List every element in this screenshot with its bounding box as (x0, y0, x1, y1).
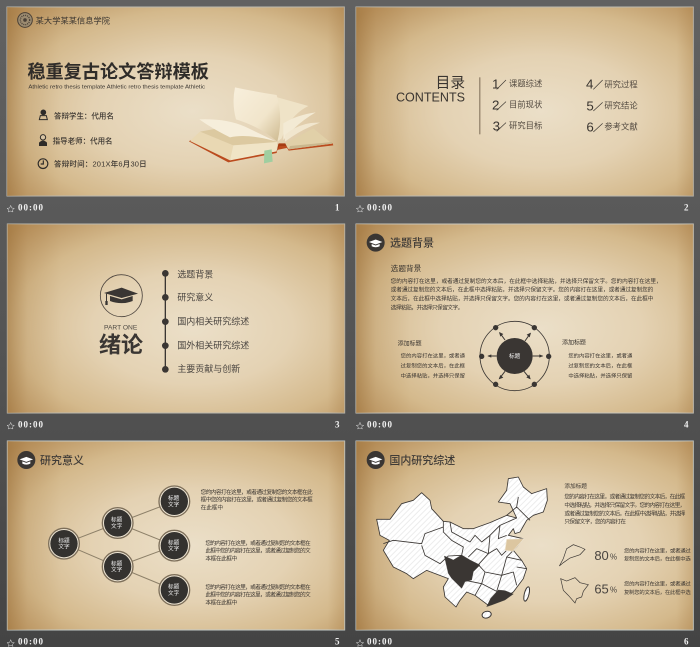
Shandong (505, 539, 524, 551)
icon: graduation cap in circle (100, 275, 142, 317)
stat 65% text (624, 579, 691, 596)
heading: 国内研究综述 (389, 453, 455, 467)
text block 2 (205, 539, 311, 562)
footer: time: 00:00 (18, 419, 44, 429)
student line: 答辩学生：代用名 (54, 111, 114, 121)
school name: 某大学某某信息学院 (36, 15, 110, 25)
stat 80% text: 您的内容打在这里，或者通过 (624, 546, 691, 554)
Guangdong (487, 590, 513, 607)
footer: time: 00:00 (367, 419, 393, 429)
tree nodes: 标题 (168, 538, 180, 546)
Taiwan (523, 586, 531, 602)
paragraph: 选择粘贴，并选择只保留文字。 (391, 304, 463, 312)
text block 2: 您的内容打在这里，或者通过复制您的文本框在 (205, 539, 311, 547)
radial diagram: 标题 (509, 352, 521, 360)
left text block: 您的内容打在这里，或者通 (401, 352, 466, 360)
footer: page number: 5 (335, 637, 340, 647)
heading: CONTENTS: CONTENTS (396, 90, 465, 105)
slide 5: significance (7, 441, 345, 647)
timeline labels (177, 269, 249, 374)
footer: page number: 2 (684, 202, 689, 212)
stat 80% text: 复制您的文本后，在此框中选 (624, 554, 691, 562)
paragraph (391, 277, 662, 312)
icon: Guangdong outline (559, 545, 585, 566)
timeline labels: 国外相关研究综述 (177, 339, 249, 350)
stat 65% text: 复制您的文本后，在此框中选 (624, 588, 691, 596)
text block 1: 您的内容打在这里，或者通过复制您的文本框在此 (201, 488, 313, 496)
text block 1: 框中您的内容打在这里，或者通过复制您的文本框 (201, 496, 313, 504)
paragraph: 或者通过复制您的文本后，在此框中选择粘贴，并选择只保留文字。您的内容打在这里，或者通过复制您的 (391, 285, 654, 293)
contents list right: 研究结论 (604, 101, 638, 111)
label: part one: PART ONE (104, 324, 138, 331)
subtitle: Athletic retro thesis template Athletic retro thesis template Athletic (28, 85, 205, 91)
timeline labels: 研究意义 (177, 291, 213, 302)
tree nodes: 文字 (111, 522, 123, 530)
icon: Sichuan outline (561, 578, 588, 603)
subheading: 选题背景 (391, 263, 422, 273)
slide 2: contents (356, 7, 693, 212)
text block 3 (205, 583, 311, 606)
Hainan (481, 610, 492, 619)
contents list left: 课题综述 (509, 79, 542, 89)
text block (564, 482, 686, 526)
contents list left: 目前现状 (509, 100, 543, 110)
date line: 答辩时间：201X年6月30日 (54, 159, 147, 169)
paragraph: 您的内容打在这里，或者通过复制您的文本后，在此框中选择粘贴，并选择只保留文字。您的内容打在这里， (391, 277, 662, 285)
text block: 中选择粘贴，并选择只保留文字。您的内容打在这里， (564, 501, 685, 509)
footer: page number: 1 (335, 202, 340, 212)
tree nodes: 标题 (111, 516, 123, 524)
China map (377, 477, 547, 619)
Sichuan (444, 555, 480, 588)
right text block: 中选择粘贴，并选择只保留 (568, 371, 632, 379)
right text block: 您的内容打在这里，或者通 (568, 352, 633, 360)
tree nodes: 文字 (58, 543, 70, 551)
heading: 目录: 目录 (436, 74, 465, 91)
contents list right: 4 (586, 76, 594, 91)
footer: page number: 3 (335, 419, 340, 429)
tree nodes: 标题 (168, 583, 180, 591)
tree nodes: 文字 (168, 500, 180, 508)
slide 6: domestic research (356, 441, 693, 647)
stat 65% text: 您的内容打在这里，或者通过 (624, 579, 691, 587)
timeline (162, 270, 169, 373)
timeline labels: 选题背景 (177, 269, 213, 280)
stat 65% (594, 581, 617, 596)
stat 80%: % (610, 552, 617, 561)
icon: university seal (18, 13, 32, 27)
paragraph: 文本后，在此框中选择粘贴，并选择只保留文字。您的内容打在这里，或者通过复制您的文本后，在此框中 (391, 294, 654, 302)
stat 65%: 65 (594, 581, 609, 596)
right text block: 过复制您的文本后，在此框 (568, 361, 633, 369)
text block 3: 此框中您的内容打在这里，或者通过复制您的文 (205, 591, 311, 599)
left text block (398, 339, 466, 379)
text block: 添加标题 (564, 482, 587, 490)
tree nodes: 标题 (58, 536, 70, 544)
icon: teacher (39, 135, 47, 146)
bookmark (264, 149, 273, 163)
left text block: 中选择粘贴，并选择只保留 (401, 371, 465, 379)
contents list left: 2 (492, 98, 499, 113)
tree nodes: 文字 (111, 566, 123, 574)
text block 2: 此框中您的内容打在这里，或者通过复制您的文 (205, 547, 311, 555)
slide 3: part one (7, 224, 345, 429)
divider (479, 77, 480, 134)
contents list right: 6 (586, 119, 594, 134)
tree nodes: 标题 (111, 559, 123, 567)
icon: student (39, 110, 47, 120)
radial diagram (479, 321, 551, 391)
text block 1 (201, 488, 313, 511)
tree nodes: 文字 (168, 589, 180, 597)
text block 2: 本框在此框中 (205, 554, 238, 562)
left text block: 添加标题 (398, 339, 422, 347)
slide 1: cover (7, 7, 344, 212)
footer: time: 00:00 (18, 202, 44, 212)
contents list left: 研究目标 (509, 121, 542, 131)
contents list right (586, 76, 638, 134)
text block 3: 您的内容打在这里，或者通过复制您的文本框在 (205, 583, 311, 591)
footer: time: 00:00 (18, 637, 44, 647)
contents list left: 1 (492, 77, 499, 92)
tree nodes: 文字 (168, 545, 180, 553)
text block: 只保留文字，您的内容打在 (564, 518, 626, 526)
connector lines (64, 501, 174, 590)
heading: 绪论: 绪论 (99, 333, 143, 358)
footer: page number: 6 (684, 637, 689, 647)
icon: header cap (367, 234, 385, 252)
text block 3: 本框在此框中 (205, 598, 238, 606)
icon: clock (38, 159, 48, 168)
contents list left: 3 (493, 119, 500, 134)
footer: time: 00:00 (367, 637, 393, 647)
icon: header cap (367, 451, 385, 469)
text block: 或者通过复制您的文本后，在此框中选择粘贴，并选择 (564, 509, 686, 517)
contents list right: 参考文献 (604, 122, 638, 132)
footer: page number: 4 (684, 419, 689, 429)
right text block: 添加标题 (562, 339, 586, 347)
text block: 您的内容打在这里，或者通过复制您的文本后，在此框 (564, 493, 686, 501)
footer: time: 00:00 (367, 202, 393, 212)
right text block (562, 339, 633, 379)
heading: 研究意义 (40, 453, 84, 467)
slide 4: background (356, 224, 693, 429)
teacher line: 指导老师：代用名 (53, 136, 113, 146)
illustration: open book (189, 87, 333, 163)
contents list left (492, 77, 543, 134)
tree nodes (49, 486, 190, 605)
stat 65%: % (610, 586, 617, 595)
timeline labels: 国内相关研究综述 (177, 315, 249, 326)
stat 80%: 80 (594, 548, 609, 563)
contents list right: 5 (586, 98, 594, 113)
contents list right: 研究过程 (604, 80, 638, 90)
text block 1: 在此框中 (201, 503, 223, 511)
tree nodes: 标题 (168, 494, 180, 502)
stat 80% text (624, 546, 691, 562)
heading: 选题背景 (390, 236, 434, 250)
timeline labels: 主要贡献与创新 (177, 363, 240, 374)
left text block: 过复制您的文本后，在此框 (401, 361, 466, 369)
icon: header cap (17, 451, 35, 469)
main title: 稳重复古论文答辩模板 (27, 61, 209, 82)
stat 80% (594, 548, 617, 563)
